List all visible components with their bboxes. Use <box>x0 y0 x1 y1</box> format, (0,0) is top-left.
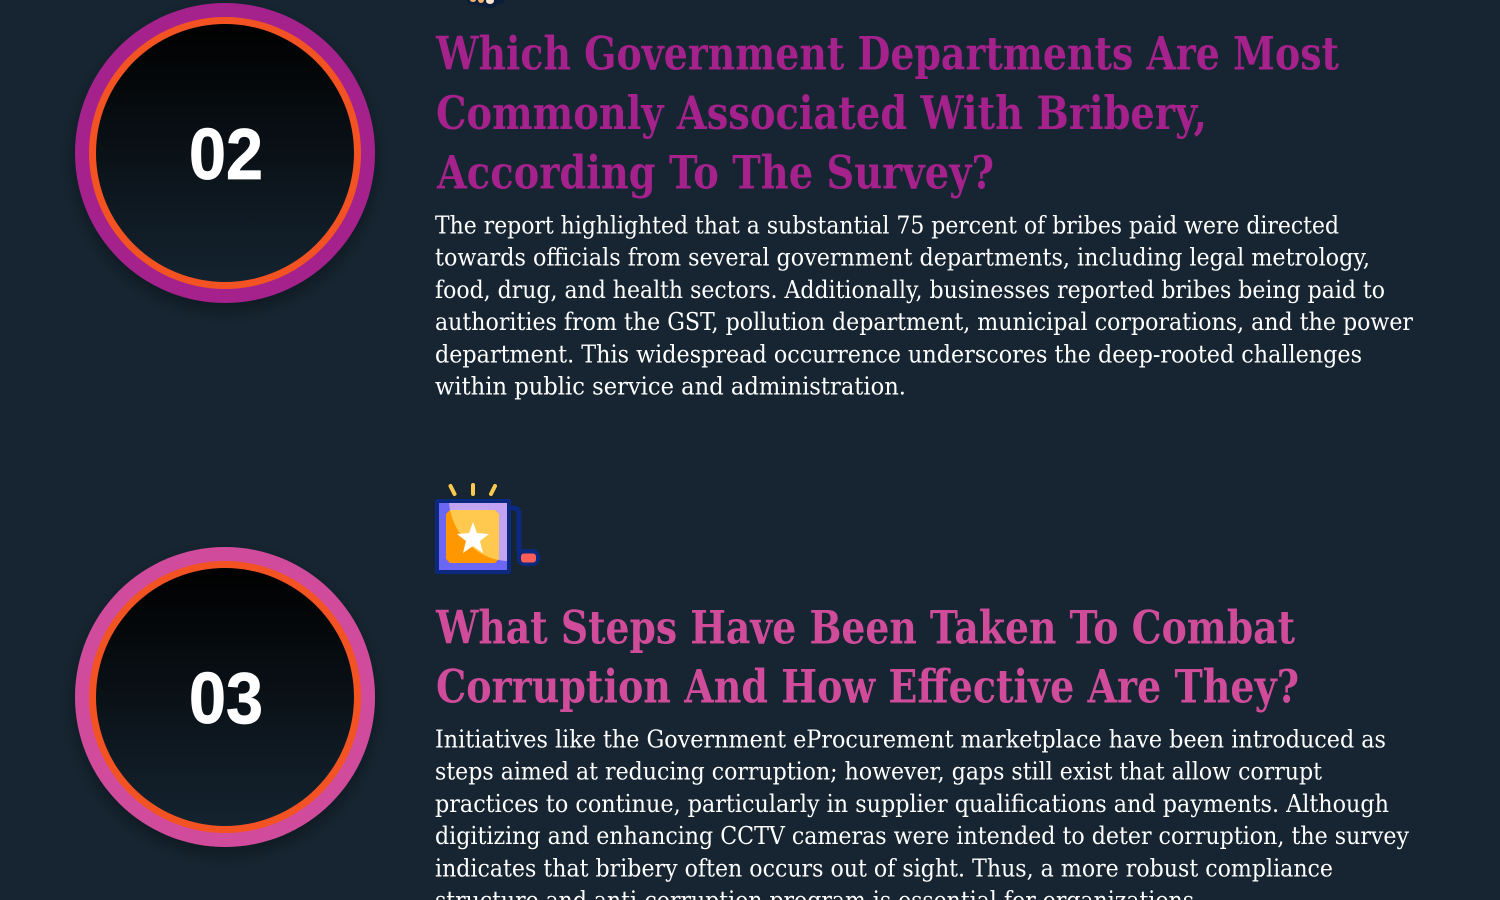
heading: section 03: Corruption And How Effective Are They? <box>436 660 1299 714</box>
icon: star in framed box with crank <box>435 485 540 574</box>
text block: section 02 body: within public service and administration. <box>435 372 906 400</box>
text block: section 02 body: towards officials from several government departments, including legal metrology, <box>435 244 1370 272</box>
text block: section 03 body: indicates that bribery often occurs out of sight. Thus, a more robust compliance <box>435 854 1333 882</box>
text block: section 03 body: digitizing and enhancing CCTV cameras were intended to deter corruption, the survey <box>435 822 1409 850</box>
text block: section 03 body: steps aimed at reducing corruption; however, gaps still exist that allow corrupt <box>435 758 1322 786</box>
badge: number 03: 03 <box>189 659 263 739</box>
text block: section 02 body: department. This widespread occurrence underscores the deep-rooted challenges <box>435 340 1362 368</box>
icon: cropped illustration at top edge <box>467 0 504 8</box>
text block: section 02 body: authorities from the GST, pollution department, municipal corporations, and the power <box>435 308 1413 336</box>
heading: section 02: Commonly Associated With Bribery, <box>436 86 1207 140</box>
text block: section 03 body: Initiatives like the Government eProcurement marketplace have been introduced as <box>435 726 1386 754</box>
text block: section 03 body: practices to continue, particularly in supplier qualifications and payments. Although <box>435 790 1389 818</box>
heading: section 02 <box>435 26 1340 200</box>
badge: number 03 <box>75 547 375 847</box>
badge: number 02 <box>75 3 375 303</box>
text block: section 02 body <box>435 212 1413 400</box>
text block: section 02 body: The report highlighted that a substantial 75 percent of bribes paid were directed <box>435 212 1339 240</box>
heading: section 02: According To The Survey? <box>436 146 994 200</box>
text block: section 02 body: food, drug, and health sectors. Additionally, businesses reported bribes being paid to <box>435 276 1385 304</box>
heading: section 03 <box>435 600 1299 714</box>
text block: section 03 body <box>435 726 1409 900</box>
heading: section 03: What Steps Have Been Taken To Combat <box>435 600 1296 654</box>
badge: number 02: 02 <box>189 115 263 195</box>
